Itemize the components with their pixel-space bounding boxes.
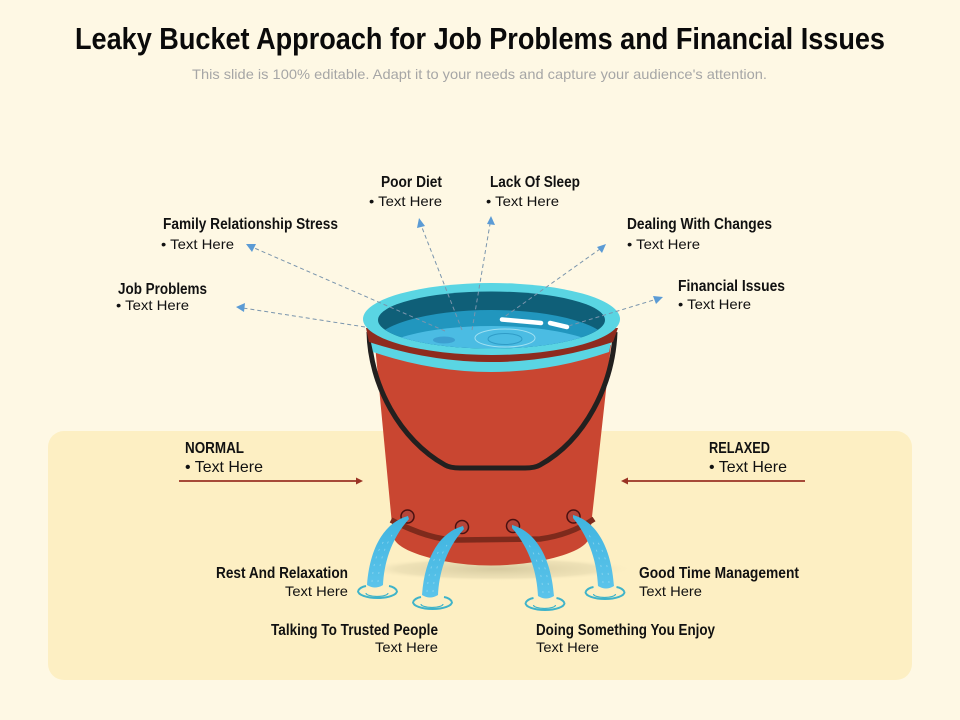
label: normal: • Text Here xyxy=(185,459,263,476)
bucket handle xyxy=(369,332,615,468)
arrow: financial issues xyxy=(562,296,663,328)
label: rest and relaxation: Text Here xyxy=(285,583,348,599)
label: normal xyxy=(185,440,263,476)
water highlights xyxy=(502,320,567,327)
label: dealing with changes: • Text Here xyxy=(627,236,700,252)
label: normal: NORMAL xyxy=(185,440,244,457)
label: doing something you enjoy xyxy=(536,622,715,655)
label: good time management: Text Here xyxy=(639,583,702,599)
bucket lower band xyxy=(391,519,594,540)
label: talking to trusted people: Text Here xyxy=(375,639,438,655)
label: relaxed xyxy=(709,440,787,476)
bucket body xyxy=(375,345,611,566)
label: good time management: Good Time Management xyxy=(639,565,799,582)
label: lack of sleep xyxy=(486,174,580,209)
label: family relationship stress: Family Relationship Stress xyxy=(163,216,338,233)
rim xyxy=(363,283,620,355)
arrow: normal xyxy=(179,478,363,484)
water spray xyxy=(372,535,609,593)
label: rest and relaxation: Rest And Relaxation xyxy=(216,565,348,582)
arrow: job problems xyxy=(236,303,365,327)
label: doing something you enjoy: Doing Something You Enjoy xyxy=(536,622,715,639)
dark red rim band xyxy=(366,328,618,362)
lower panel xyxy=(48,431,912,680)
water ripples xyxy=(358,586,624,610)
label: financial issues: Financial Issues xyxy=(678,278,785,295)
arrow: lack of sleep xyxy=(472,216,495,330)
water surface xyxy=(385,310,598,348)
subtitle: This slide is 100% editable. Adapt it to your needs and capture your audience's attention. xyxy=(192,66,767,82)
label: good time management xyxy=(639,565,799,599)
arrow: dealing with changes xyxy=(500,244,606,320)
label: dealing with changes xyxy=(627,216,772,252)
cyan lower band xyxy=(370,338,612,372)
label: job problems xyxy=(116,281,207,313)
label: relaxed: • Text Here xyxy=(709,459,787,476)
label: relaxed: RELAXED xyxy=(709,440,770,457)
floor shadow xyxy=(362,557,632,581)
bucket interior xyxy=(378,292,605,348)
label: poor diet xyxy=(369,174,442,209)
label: financial issues xyxy=(678,278,785,312)
label: talking to trusted people: Talking To Trusted People xyxy=(271,622,438,639)
label: lack of sleep: • Text Here xyxy=(486,193,559,209)
arrow: poor diet xyxy=(417,218,462,330)
label: talking to trusted people xyxy=(271,622,438,655)
label: lack of sleep: Lack Of Sleep xyxy=(490,174,580,191)
label: doing something you enjoy: Text Here xyxy=(536,639,599,655)
arrow: relaxed xyxy=(621,478,805,484)
drain holes xyxy=(401,510,580,534)
water streams xyxy=(367,515,614,598)
label: financial issues: • Text Here xyxy=(678,296,751,312)
label: poor diet: • Text Here xyxy=(369,193,442,209)
label: dealing with changes: Dealing With Changes xyxy=(627,216,772,233)
label: job problems: • Text Here xyxy=(116,297,189,313)
bucket xyxy=(116,174,805,655)
label: job problems: Job Problems xyxy=(118,281,207,298)
label: poor diet: Poor Diet xyxy=(381,174,442,191)
label: rest and relaxation xyxy=(216,565,348,599)
label: family relationship stress xyxy=(161,216,338,252)
label: family relationship stress: • Text Here xyxy=(161,236,234,252)
arrow: family relationship stress xyxy=(246,244,445,331)
